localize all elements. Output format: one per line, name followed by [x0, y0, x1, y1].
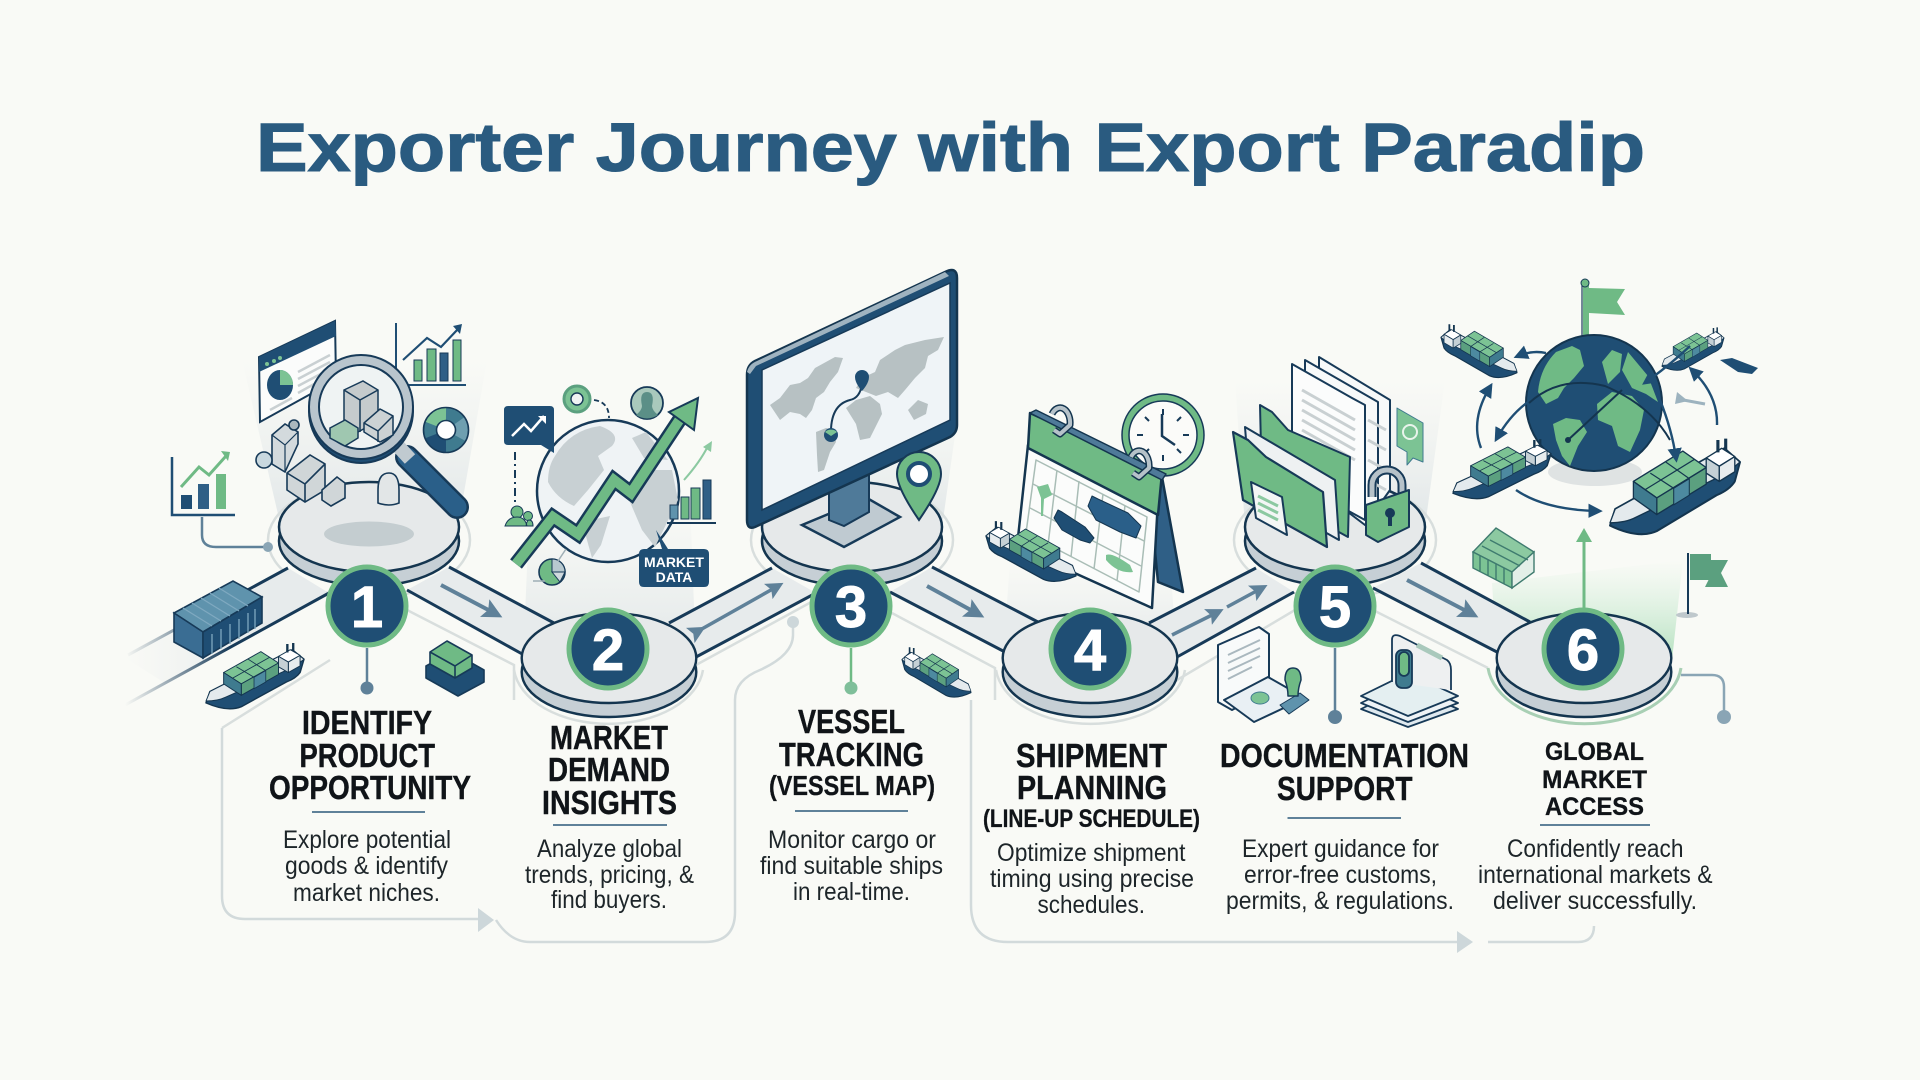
road: step 5 to step 6: [1373, 563, 1530, 652]
icon: calendar: [1017, 408, 1183, 608]
platform 6: [1488, 613, 1681, 724]
step badge 1: [328, 567, 406, 645]
step 2 text: Analyze global: [537, 835, 682, 863]
icon: small shapes and boxes: [256, 420, 399, 506]
step 4 text: (LINE-UP SCHEDULE): [983, 805, 1200, 833]
step badge 3: [812, 567, 890, 645]
incoming road at the left: [125, 568, 329, 705]
step 6 text: ACCESS: [1545, 793, 1644, 821]
step 3 text: find suitable ships: [760, 852, 943, 880]
icon: gear, avatar and people: [505, 386, 663, 526]
step badge 4: 4: [1074, 618, 1106, 683]
road: step 1 to step 2: [407, 567, 554, 655]
icon: donut chart: [424, 408, 468, 452]
step 5 text: SUPPORT: [1277, 770, 1412, 807]
icons: ships around the globe: [1441, 324, 1758, 534]
step 6 text: GLOBAL: [1545, 738, 1644, 766]
step 1 text: PRODUCT: [300, 737, 435, 774]
step badge 6: [1544, 610, 1622, 688]
callout: market data: [639, 530, 709, 587]
step 3 text: [760, 703, 943, 906]
icon: small pie: [533, 549, 566, 585]
step 5 text: DOCUMENTATION: [1220, 737, 1469, 774]
icon: magnifying glass with boxes: [309, 355, 457, 507]
step 3 text: in real-time.: [793, 878, 910, 906]
step 1 text: OPPORTUNITY: [269, 769, 471, 806]
step 2 text: INSIGHTS: [542, 784, 677, 821]
step 4 text: SHIPMENT: [1016, 737, 1167, 774]
step badge 1: 1: [351, 575, 383, 640]
icon: top chart with arrow: [396, 323, 466, 385]
arrows around the globe: [1477, 346, 1717, 511]
step 3 text: TRACKING: [779, 736, 924, 773]
step badge 2: [569, 610, 647, 688]
step badge 5: [1296, 567, 1374, 645]
step 4 text: timing using precise: [990, 865, 1194, 893]
step 6 text: MARKET: [1542, 766, 1647, 794]
step badge 6: 6: [1567, 618, 1599, 683]
step badge 5: 5: [1319, 575, 1351, 640]
step badge 2: 2: [592, 618, 624, 683]
step 3 text: Monitor cargo or: [768, 826, 936, 854]
road: step 4 to step 5: [1149, 568, 1294, 657]
icon: documents and folders: [1233, 357, 1423, 547]
road: step 3 to step 4: [890, 567, 1038, 652]
icon: stamped paper stack: [1361, 635, 1458, 727]
step 1 text: IDENTIFY: [302, 704, 432, 741]
icon: flag beside step 6: [1676, 553, 1728, 618]
step 5 text: Expert guidance for: [1242, 835, 1439, 863]
icon: browser window: [259, 321, 336, 422]
icon: ship under step 1: [206, 643, 304, 709]
icon: globe with market arrow: [516, 398, 698, 564]
icon: location pin: [897, 452, 941, 520]
step 4 text: PLANNING: [1017, 769, 1167, 806]
icon: faint arrow near the globe: [1675, 392, 1705, 404]
step 2 text: trends, pricing, &: [525, 861, 694, 889]
icon: ship under step 3: [902, 647, 971, 697]
arrow: rising from step 6: [1576, 528, 1592, 610]
platform 2: [522, 613, 696, 717]
step 1 text: Explore potential: [283, 826, 451, 854]
platform 4: [1003, 613, 1177, 717]
faint rings and connecting lines beneath the route: [222, 482, 1488, 728]
icon: clock: [1122, 394, 1204, 476]
step 6 text: deliver successfully.: [1493, 887, 1697, 915]
title: Exporter Journey with Export Paradip: [256, 109, 1645, 186]
step 4 text: Optimize shipment: [997, 839, 1186, 867]
step badge 3: 3: [835, 575, 867, 640]
callout: market data: DATA: [656, 569, 692, 585]
step 6 text: international markets &: [1478, 861, 1713, 889]
step 6 text: [1478, 738, 1713, 915]
icon: monitor with world map: [747, 270, 957, 547]
icon: globe with flag and shipping routes: [1526, 279, 1670, 486]
platform 1: [279, 482, 459, 586]
icon: ship beside calendar: [986, 521, 1076, 581]
platform 5: [1245, 482, 1425, 586]
step badge 4: [1051, 610, 1129, 688]
callout: market data: MARKET: [644, 554, 704, 570]
step 2 text: [525, 719, 694, 914]
icon: cargo truck: [426, 641, 484, 696]
icon: right bar chart: [667, 441, 716, 523]
pin connectors below badges: [360, 648, 1731, 724]
step 1 text: market niches.: [293, 879, 440, 907]
step 4 text: [983, 737, 1200, 919]
step 2 text: find buyers.: [551, 886, 667, 914]
platform 3: [762, 482, 942, 586]
step 1 text: goods & identify: [285, 852, 448, 880]
light beams behind the icons: [242, 360, 1683, 660]
step 2 text: MARKET: [550, 719, 668, 756]
icon: speech bubble trend: [504, 406, 554, 502]
step 1 text: [269, 704, 471, 907]
flow arrowheads and node: [478, 616, 1473, 953]
step 2 text: DEMAND: [548, 751, 670, 788]
icon: padlock: [1366, 470, 1409, 542]
step 3 text: (VESSEL MAP): [769, 770, 935, 801]
step 4 text: schedules.: [1038, 891, 1145, 919]
icon: small bar chart left: [172, 451, 273, 552]
step 5 text: error-free customs,: [1244, 861, 1437, 889]
step 6 text: Confidently reach: [1507, 835, 1684, 863]
step 5 text: permits, & regulations.: [1226, 887, 1454, 915]
icon: green container: [1473, 528, 1534, 588]
flow lines around the text: [222, 622, 1594, 942]
step 3 text: VESSEL: [798, 703, 905, 740]
icon: document and stamp: [1218, 627, 1309, 722]
icon: shipping container: [174, 581, 262, 658]
road: step 2 to step 3: [669, 568, 816, 657]
step 5 text: [1220, 737, 1469, 915]
